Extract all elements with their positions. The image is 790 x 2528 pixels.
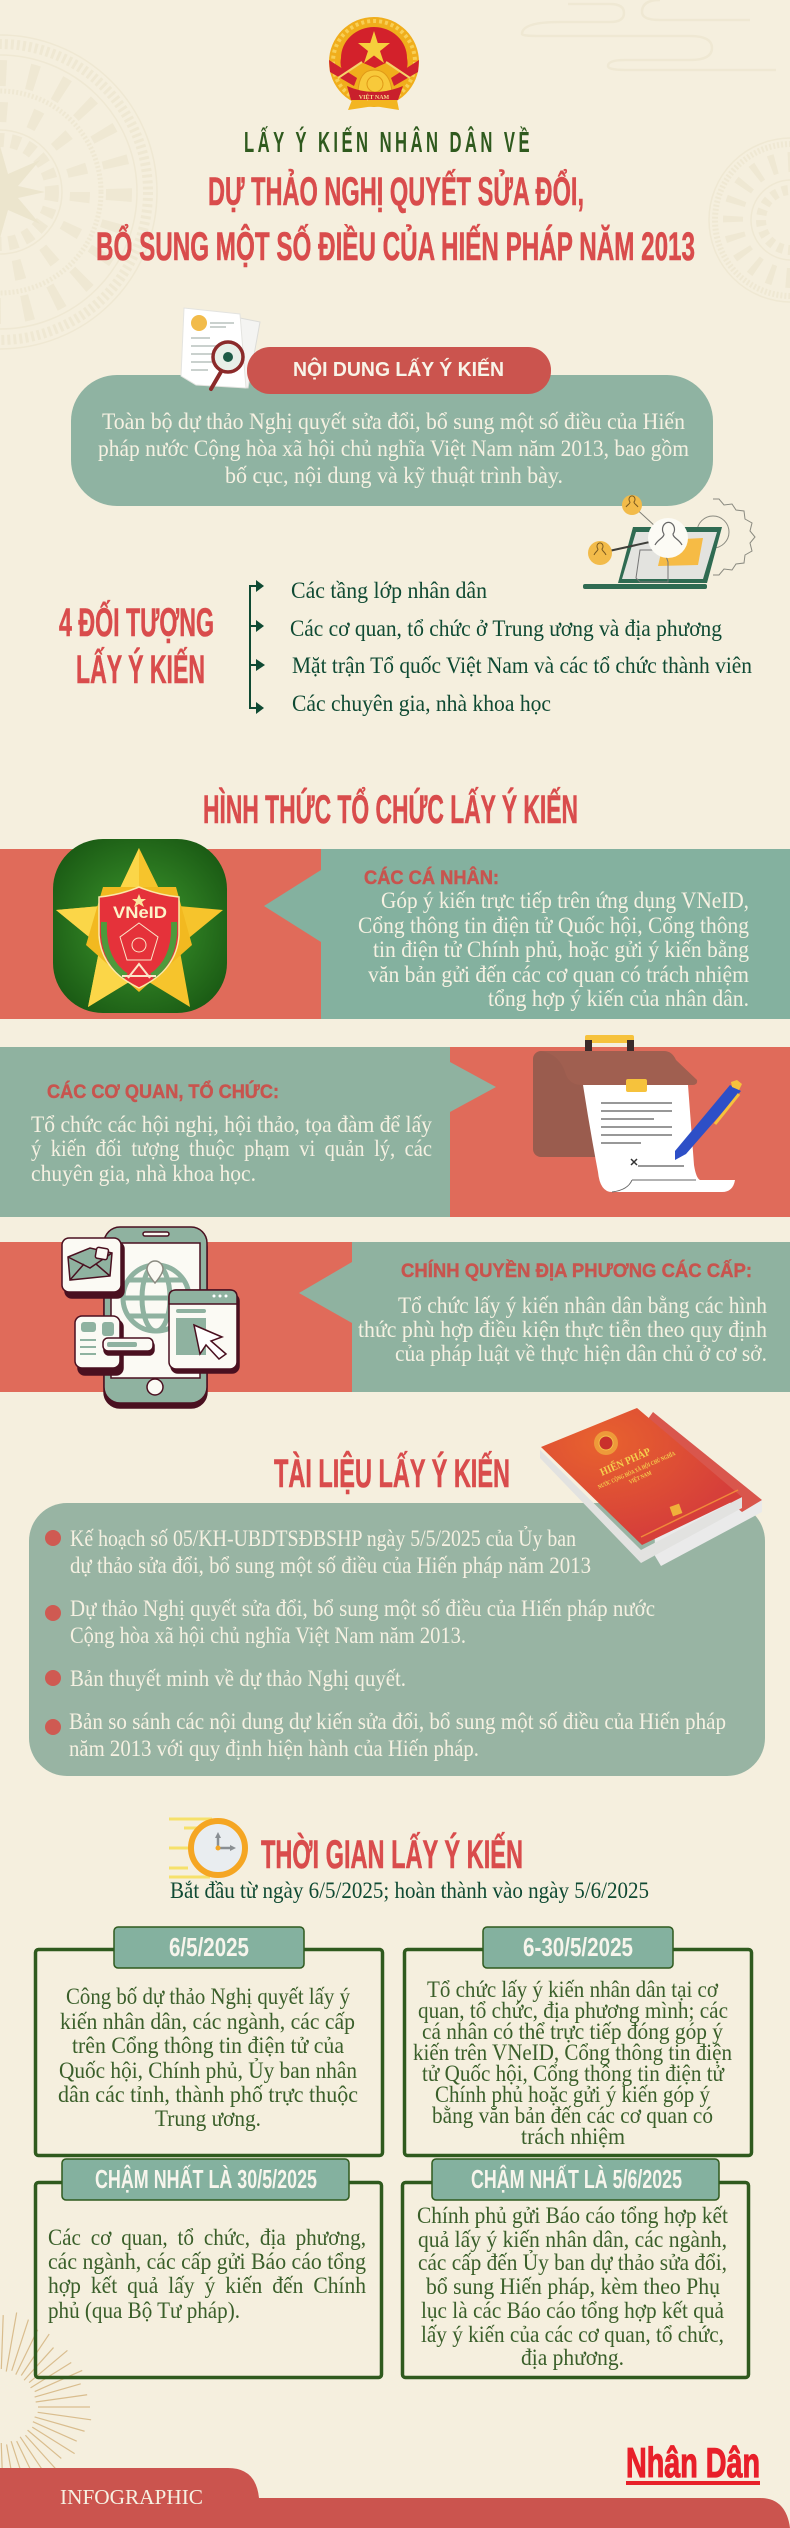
card text: kiến trên VNeID, Cổng thông tin điện bbox=[413, 2040, 732, 2066]
bullets bbox=[45, 1530, 61, 1735]
card text: bổ sung Hiến pháp, kèm theo Phụ bbox=[426, 2274, 720, 2300]
body text bbox=[358, 888, 749, 1012]
card text: hợp kết quả lấy ý kiến đến Chính bbox=[48, 2273, 366, 2299]
timeline card: 6/5/2025: 6/5/2025 bbox=[169, 1932, 249, 1962]
body text: tin điện tử Chính phủ, hoặc gửi ý kiến bằng bbox=[373, 937, 749, 963]
card text: Tổ chức lấy ý kiến nhân dân tại cơ bbox=[427, 1977, 719, 2003]
list: đối tượng: Các tầng lớp nhân dân bbox=[291, 578, 487, 604]
timeline card: chậm nhất là 30/5/2025 bbox=[36, 2159, 382, 2378]
book title: HIẾN PHÁP bbox=[598, 1445, 653, 1479]
background: bronze drum pattern right bbox=[709, 138, 790, 302]
book title bbox=[597, 1445, 677, 1491]
panel text: pháp nước Cộng hòa xã hội chủ nghĩa Việt Nam năm 2013, bao gồm bbox=[98, 436, 689, 462]
panel: nội dung lấy ý kiến bbox=[71, 375, 713, 506]
footer band bbox=[0, 2468, 790, 2528]
background: bronze drum pattern left bbox=[0, 35, 157, 349]
body text: của pháp luật về thực hiện dân chủ ở cơ sở. bbox=[395, 1341, 767, 1367]
card text: Các cơ quan, tổ chức, địa phương, bbox=[48, 2225, 366, 2251]
card text: Trung ương. bbox=[155, 2106, 261, 2132]
bracket arrows bbox=[250, 580, 265, 714]
document list: Dự thảo Nghị quyết sửa đổi, bổ sung một số điều của Hiến pháp nước bbox=[70, 1596, 655, 1622]
card text: Quốc hội, Chính phủ, Ủy ban nhân bbox=[59, 2058, 357, 2084]
list: đối tượng: Các cơ quan, tổ chức ở Trung ương và địa phương bbox=[290, 616, 722, 642]
card text: kiến nhân dân, các ngành, các cấp bbox=[60, 2009, 355, 2035]
body text bbox=[358, 1293, 767, 1367]
card text: lục là các Báo cáo tổng hợp kết quả bbox=[421, 2298, 725, 2324]
icon: briefcase and document with pen bbox=[533, 1035, 742, 1192]
heading: chính quyền địa phương: CHÍNH QUYỀN ĐỊA PHƯƠNG CÁC CẤP: bbox=[401, 1260, 752, 1282]
icon: clock bbox=[169, 1819, 245, 1877]
body text: Cổng thông tin điện tử Quốc hội, Cổng thông bbox=[358, 913, 749, 939]
heading: các cơ quan: CÁC CƠ QUAN, TỔ CHỨC: bbox=[47, 1081, 279, 1103]
card text: Công bố dự thảo Nghị quyết lấy ý bbox=[66, 1984, 350, 2010]
card text: cá nhân có thể trực tiếp đóng góp ý bbox=[422, 2019, 723, 2045]
book title: VIỆT NAM bbox=[628, 1469, 653, 1486]
panel: các cá nhân bbox=[0, 849, 790, 1019]
heading pill: nội dung lấy ý kiến: NỘI DUNG LẤY Ý KIẾN bbox=[293, 357, 504, 381]
list: đối tượng: Các chuyên gia, nhà khoa học bbox=[292, 691, 551, 717]
body text: thức phù hợp điều kiện thực tiễn theo quy định bbox=[358, 1317, 767, 1343]
body text: Tổ chức lấy ý kiến nhân dân bằng các hình bbox=[398, 1293, 767, 1319]
card text: quả lấy ý kiến nhân dân, các ngành, bbox=[418, 2227, 727, 2253]
icon: constitution book bbox=[540, 1408, 762, 1566]
list: đối tượng bbox=[290, 578, 752, 717]
heading pill: nội dung lấy ý kiến bbox=[247, 347, 551, 394]
body text: tổng hợp ý kiến của nhân dân. bbox=[488, 986, 749, 1012]
timeline card: chậm nhất là 30/5/2025: CHẬM NHẤT LÀ 30/5/2025 bbox=[95, 2164, 317, 2194]
card text: tử Quốc hội, Cổng thông tin điện tử bbox=[422, 2061, 725, 2087]
icon: document with magnifier bbox=[181, 308, 260, 389]
heading: tài liệu lấy ý kiến: TÀI LIỆU LẤY Ý KIẾN bbox=[274, 1450, 510, 1496]
document list: Kế hoạch số 05/KH-UBDTSĐBSHP ngày 5/5/2025 của Ủy ban bbox=[70, 1526, 576, 1552]
body text: chuyên gia, nhà khoa học. bbox=[31, 1161, 256, 1187]
book title: NƯỚC CỘNG HÒA XÃ HỘI CHỦ NGHĨA bbox=[597, 1449, 677, 1491]
panel text: bố cục, nội dung và kỹ thuật trình bày. bbox=[225, 463, 563, 489]
body text: ý kiến đối tượng thuộc phạm vi quản lý, các bbox=[31, 1136, 432, 1162]
sunburst decoration bbox=[1, 2312, 91, 2494]
heading: 4 đối tượng lấy ý kiến bbox=[59, 599, 214, 692]
document list: Bản so sánh các nội dung dự kiến sửa đổi, bổ sung một số điều của Hiến pháp bbox=[69, 1709, 726, 1735]
icon: VNeID app bbox=[53, 839, 227, 1013]
card text: các ngành, các cấp gửi Báo cáo tổng bbox=[48, 2249, 366, 2275]
timeline card: chậm nhất là 5/6/2025 bbox=[402, 2159, 748, 2378]
title bbox=[96, 125, 695, 269]
card text: quan, tổ chức, địa phương mình; các bbox=[418, 1998, 728, 2024]
card text: bằng văn bản đến các cơ quan có bbox=[432, 2103, 713, 2129]
icon: smartphone with apps bbox=[62, 1227, 239, 1408]
timeline card: 6-30/5/2025: 6-30/5/2025 bbox=[523, 1932, 633, 1962]
card text: trên Cổng thông tin điện tử của bbox=[72, 2033, 345, 2059]
footer band: INFOGRAPHIC bbox=[60, 2485, 203, 2509]
title kicker: LẤY Ý KIẾN NHÂN DÂN VỀ bbox=[244, 125, 533, 159]
card text bbox=[58, 1984, 358, 2132]
document list: Bản thuyết minh về dự thảo Nghị quyết. bbox=[70, 1666, 406, 1692]
panel: tài liệu bbox=[29, 1503, 765, 1776]
icon: national emblem bbox=[329, 17, 419, 110]
document list: Cộng hòa xã hội chủ nghĩa Việt Nam năm 2013. bbox=[70, 1623, 466, 1649]
body text bbox=[31, 1112, 432, 1187]
card text: Chính phủ gửi Báo cáo tổng hợp kết bbox=[417, 2203, 728, 2229]
card text: địa phương. bbox=[521, 2345, 624, 2371]
heading: thời gian lấy ý kiến: THỜI GIAN LẤY Ý KIẾN bbox=[261, 1831, 523, 1877]
body text: Góp ý kiến trực tiếp trên ứng dụng VNeID, bbox=[381, 888, 749, 914]
document list: năm 2013 với quy định hiện hành của Hiến pháp. bbox=[69, 1736, 479, 1762]
heading: các cá nhân: CÁC CÁ NHÂN: bbox=[364, 867, 499, 889]
panel: các cơ quan, tổ chức bbox=[0, 1047, 790, 1217]
subheading: dates: Bắt đầu từ ngày 6/5/2025; hoàn thành vào ngày 5/6/2025 bbox=[170, 1878, 649, 1904]
heading: 4 đối tượng lấy ý kiến: 4 ĐỐI TƯỢNG bbox=[59, 599, 214, 645]
card text bbox=[413, 1977, 732, 2150]
background: cloud outlines bbox=[522, 0, 776, 70]
card text bbox=[417, 2203, 728, 2371]
card text: phủ (qua Bộ Tư pháp). bbox=[48, 2298, 240, 2324]
card text: trách nhiệm bbox=[521, 2124, 625, 2150]
timeline card: chậm nhất là 5/6/2025: CHẬM NHẤT LÀ 5/6/2025 bbox=[471, 2164, 682, 2194]
list: đối tượng: Mặt trận Tổ quốc Việt Nam và các tổ chức thành viên bbox=[292, 653, 752, 679]
card text: dân các tỉnh, thành phố trực thuộc bbox=[58, 2082, 358, 2108]
card text: các cấp đến Ủy ban dự thảo sửa đổi, bbox=[418, 2250, 727, 2276]
icon: national emblem: VIỆT NAM bbox=[359, 93, 390, 101]
card text: Chính phủ hoặc gửi ý kiến góp ý bbox=[435, 2082, 710, 2108]
panel: chính quyền địa phương bbox=[0, 1242, 790, 1392]
icon: laptop with people bbox=[583, 495, 755, 589]
card text bbox=[48, 2225, 366, 2324]
timeline card: 6-30/5/2025 bbox=[404, 1927, 752, 2156]
document list bbox=[69, 1526, 726, 1762]
timeline card: 6/5/2025 bbox=[36, 1927, 382, 2156]
panel text: Toàn bộ dự thảo Nghị quyết sửa đổi, bổ sung một số điều của Hiến bbox=[102, 409, 685, 435]
body text: văn bản gửi đến các cơ quan có trách nhiệm bbox=[368, 962, 749, 988]
card text: lấy ý kiến của các cơ quan, tổ chức, bbox=[421, 2322, 724, 2348]
panel text bbox=[98, 409, 689, 489]
body text: Tổ chức các hội nghị, hội thảo, tọa đàm để lấy bbox=[31, 1112, 432, 1138]
icon: VNeID app: VNeID bbox=[113, 903, 167, 922]
document list: dự thảo sửa đổi, bổ sung một số điều của Hiến pháp năm 2013 bbox=[70, 1553, 591, 1579]
heading: 4 đối tượng lấy ý kiến: LẤY Ý KIẾN bbox=[76, 646, 205, 692]
